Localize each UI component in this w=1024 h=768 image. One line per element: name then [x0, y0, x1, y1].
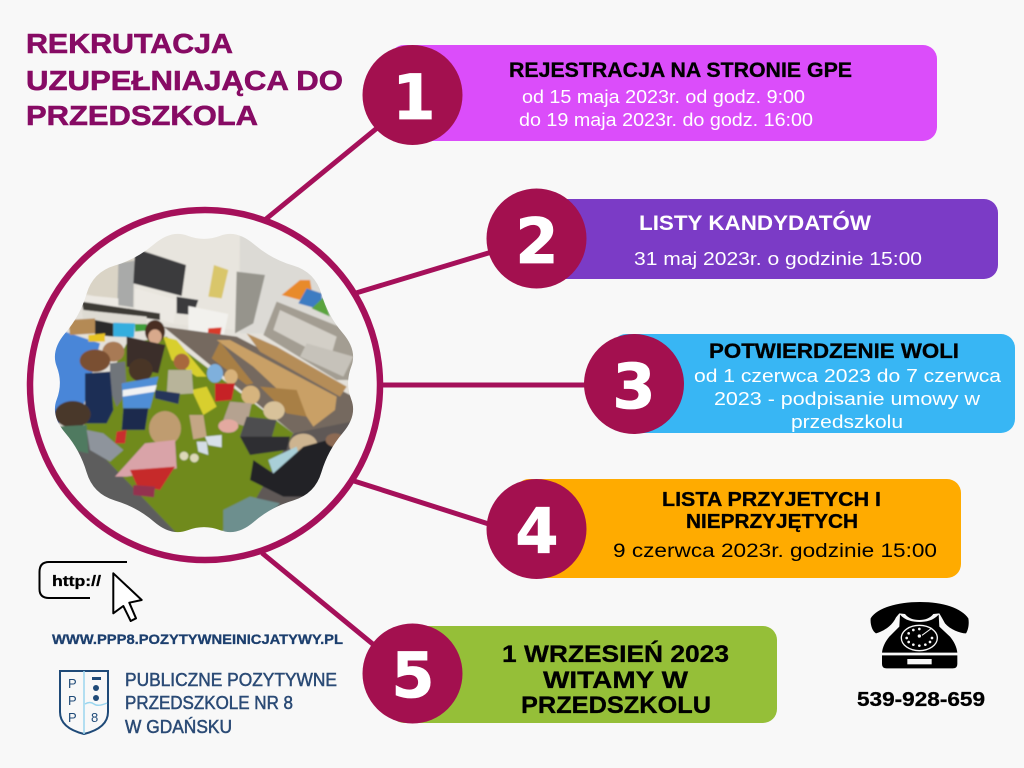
title: UZUPEŁNIAJĄCA DO [26, 65, 343, 96]
logo: shield: P [68, 693, 77, 708]
photo ring [30, 210, 380, 560]
step 2 panel [486, 188, 998, 288]
step 4 number badge [486, 479, 586, 579]
step 2 panel: LISTY KANDYDATÓW [639, 211, 871, 235]
logo: school name: PRZEDSZKOLE NR 8 [125, 693, 293, 713]
children [102, 342, 124, 362]
title [26, 28, 343, 131]
step 3 panel: 2023 - podpisanie umowy w [714, 389, 981, 409]
logo: school name [125, 670, 337, 737]
step 1 number badge [362, 45, 462, 145]
step 2 number badge [486, 188, 586, 288]
child at the bottom [223, 497, 280, 535]
step 1 panel: od 15 maja 2023r. od godz. 9:00 [522, 87, 805, 107]
girl in pink [149, 411, 181, 446]
step 2 panel: 31 maj 2023r. o godzinie 15:00 [634, 249, 922, 269]
step 4 panel: NIEPRZYJĘTYCH [686, 511, 858, 533]
step 3 panel: 3 [612, 350, 656, 423]
step 4 panel [486, 479, 961, 579]
step 3 panel: przedszkolu [791, 412, 903, 432]
step 5 panel: PRZEDSZKOLU [521, 692, 711, 719]
craft items [189, 415, 207, 439]
teacher [145, 320, 165, 343]
step 1 panel: REJESTRACJA NA STRONIE GPE [509, 59, 852, 82]
step 1 panel: 1 [392, 61, 436, 134]
step 5 panel: 1 WRZESIEŃ 2023 [502, 640, 729, 668]
step 5 panel: 5 [391, 639, 435, 712]
step 3 panel: POTWIERDZENIE WOLI [709, 340, 959, 363]
step 1 panel [362, 45, 937, 145]
step 1 panel: do 19 maja 2023r. do godz. 16:00 [519, 110, 813, 130]
step 2 panel: 2 [515, 205, 559, 278]
step 3 panel: od 1 czerwca 2023 do 7 czerwca [694, 366, 1002, 386]
step 4 panel: 9 czerwca 2023r. godzinie 15:00 [613, 541, 937, 562]
title: REKRUTACJA [26, 28, 233, 59]
logo: shield: 8 [91, 710, 98, 725]
title: PRZEDSZKOLA [26, 100, 258, 131]
step 4 panel: LISTA PRZYJETYCH I [662, 489, 881, 511]
phone number: 539-928-659 [857, 689, 985, 711]
step 3 panel [584, 334, 1015, 434]
photo: children in a preschool classroom [54, 234, 354, 532]
icon: browser address with cursor: http:// [52, 573, 102, 590]
connector lines from photo to steps [262, 124, 590, 650]
step 5 panel [362, 624, 777, 724]
icon: rotary telephone [871, 602, 969, 668]
website address: WWW.PPP8.POZYTYWNEINICJATYWY.PL [52, 631, 343, 647]
logo: school name: W GDAŃSKU [125, 717, 232, 737]
step 5 number badge [362, 624, 462, 724]
step 3 number badge [584, 334, 684, 434]
logo: shield: P [68, 710, 77, 725]
step 4 panel: 4 [515, 495, 559, 568]
icon: browser address with cursor [40, 562, 142, 621]
tables and chairs [217, 340, 337, 427]
step 5 panel: WITAMY W [543, 667, 688, 694]
logo: shield [60, 671, 108, 734]
logo: shield: P [68, 676, 77, 691]
logo: school name: PUBLICZNE POZYTYWNE [125, 670, 337, 690]
